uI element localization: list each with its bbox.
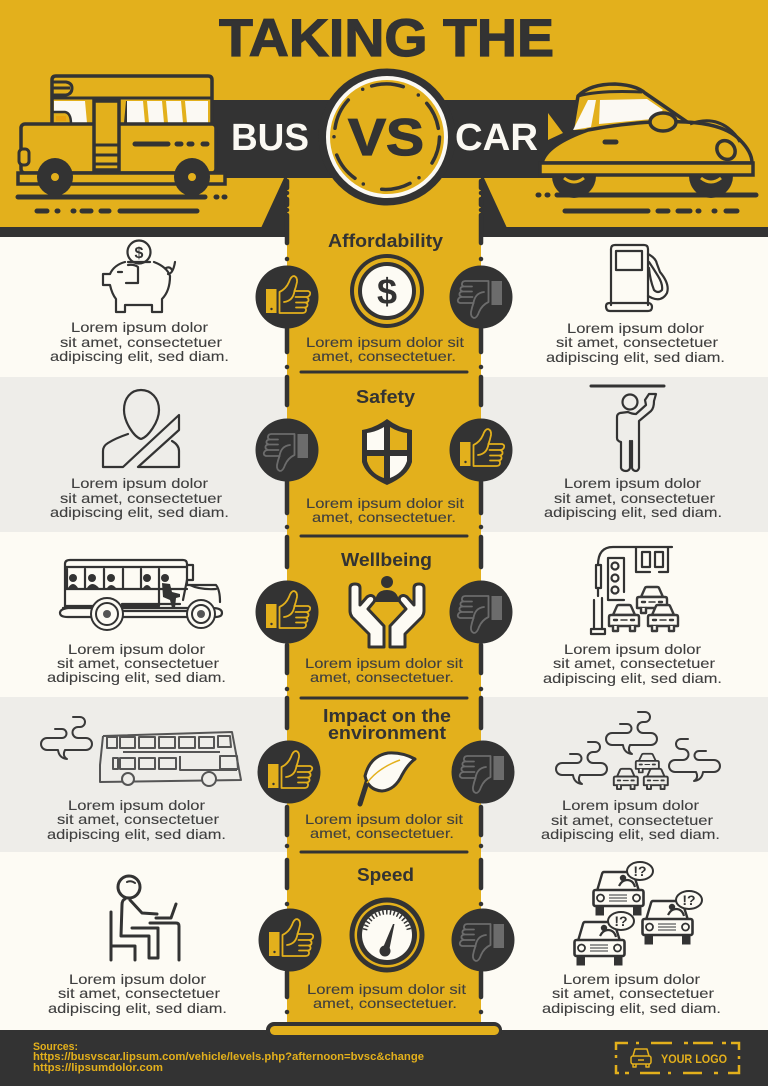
banner band <box>212 100 580 228</box>
background bands <box>0 236 768 1030</box>
row: speed <box>48 862 721 1016</box>
bus text: speed: adipiscing elit, sed diam. <box>48 1000 227 1016</box>
bus text: speed: sit amet, consectetuer <box>58 985 220 1001</box>
standing passenger icon <box>591 386 664 471</box>
car text: wellbeing: adipiscing elit, sed diam. <box>543 670 722 686</box>
column text: affordability: Lorem ipsum dolor sit <box>306 334 464 350</box>
row: wellbeing <box>47 547 722 686</box>
bus text: speed <box>48 971 227 1016</box>
traffic jam icon <box>591 547 678 634</box>
row: environment <box>41 706 720 842</box>
VS badge: VS <box>348 109 424 167</box>
column text: affordability: amet, consectetuer. <box>312 348 456 364</box>
car text: affordability: adipiscing elit, sed diam. <box>546 349 725 365</box>
thumbs down <box>450 266 512 328</box>
column base <box>266 1022 502 1038</box>
heading: wellbeing: Wellbeing <box>341 550 432 570</box>
CAR label: CAR <box>455 117 538 159</box>
car text: affordability <box>546 320 725 365</box>
car illustration <box>538 84 756 211</box>
thumbs down <box>256 418 318 482</box>
column text: wellbeing <box>305 655 463 685</box>
car text: safety: adipiscing elit, sed diam. <box>544 504 722 520</box>
confused drivers icon <box>574 862 702 966</box>
car text: affordability: Lorem ipsum dolor <box>567 320 704 336</box>
bus text: environment: sit amet, consectetuer <box>57 811 219 827</box>
bus text: environment <box>47 797 226 842</box>
car text: affordability: sit amet, consectetuer <box>556 334 718 350</box>
thumbs up <box>450 418 512 482</box>
BUS label: BUS <box>231 117 309 159</box>
heading: speed: Speed <box>357 865 414 885</box>
sources: Sources: <box>33 1041 78 1053</box>
caring hands icon <box>350 576 424 647</box>
seat belt person icon <box>103 390 179 467</box>
bus text: affordability: Lorem ipsum dolor <box>71 319 208 335</box>
heading: safety: Safety <box>356 387 415 407</box>
car text: speed: adipiscing elit, sed diam. <box>542 1000 721 1016</box>
bus text: affordability: sit amet, consectetuer <box>60 334 222 350</box>
sources <box>33 1041 424 1074</box>
bus text: safety <box>50 475 229 520</box>
car text: speed: sit amet, consectetuer <box>552 985 714 1001</box>
car text: speed: Lorem ipsum dolor <box>563 971 700 987</box>
thumbs down <box>450 580 512 644</box>
car text: environment: sit amet, consectetuer <box>551 812 713 828</box>
bus smoke icon <box>41 717 92 759</box>
column text: speed: amet, consectetuer. <box>313 995 457 1011</box>
column text: environment <box>305 811 463 841</box>
thumbs up <box>256 266 318 328</box>
car text: wellbeing: sit amet, consectetuer <box>553 655 715 671</box>
double decker icon <box>100 732 241 786</box>
column text: safety: Lorem ipsum dolor sit <box>306 495 464 511</box>
car smoke icon <box>556 712 720 789</box>
row: affordability <box>50 231 725 365</box>
column text: affordability <box>306 334 464 364</box>
dollar coin icon: $ <box>377 271 397 312</box>
header <box>0 0 768 237</box>
car text: environment: adipiscing elit, sed diam. <box>541 826 720 842</box>
bus text: safety: adipiscing elit, sed diam. <box>50 504 229 520</box>
bus text: affordability: adipiscing elit, sed diam. <box>50 348 229 364</box>
VS badge <box>318 68 456 206</box>
heading: environment: environment <box>328 723 446 743</box>
car text: wellbeing <box>543 641 722 686</box>
column text: wellbeing: Lorem ipsum dolor sit <box>305 655 463 671</box>
bus text: affordability <box>50 319 229 364</box>
sources: https://busvscar.lipsum.com/vehicle/levels.php?afternoon=bvsc&change <box>33 1051 424 1063</box>
thumbs up <box>258 740 320 804</box>
bus illustration <box>18 76 225 211</box>
bus text: safety: sit amet, consectetuer <box>60 490 222 506</box>
logo text: YOUR LOGO <box>661 1052 727 1066</box>
person at laptop icon <box>111 876 179 960</box>
header base strip <box>0 227 768 237</box>
petrol pump icon <box>606 245 668 311</box>
bus text: wellbeing <box>47 641 226 685</box>
column text: speed: Lorem ipsum dolor sit <box>307 981 466 997</box>
car text: wellbeing: Lorem ipsum dolor <box>564 641 701 657</box>
column text: wellbeing: amet, consectetuer. <box>310 669 454 685</box>
shield icon <box>362 419 412 485</box>
column text: safety <box>306 495 464 525</box>
thumbs up <box>256 580 318 644</box>
sources: https://lipsumdolor.com <box>33 1062 163 1074</box>
bus text: wellbeing: Lorem ipsum dolor <box>68 641 205 657</box>
section dividers <box>301 372 467 852</box>
heading: environment <box>323 706 451 743</box>
leaf icon <box>360 753 415 804</box>
bus text: safety: Lorem ipsum dolor <box>71 475 208 491</box>
speedometer icon <box>350 898 424 972</box>
bus text: wellbeing: adipiscing elit, sed diam. <box>47 669 226 685</box>
car text: safety: sit amet, consectetuer <box>554 490 715 506</box>
thumbs up <box>258 908 322 972</box>
title: TAKING THE <box>219 9 554 68</box>
car text: environment: Lorem ipsum dolor <box>562 797 699 813</box>
car text: environment <box>541 797 720 842</box>
dollar coin icon <box>350 254 424 328</box>
thumbs down <box>452 908 514 972</box>
dashed column edges <box>287 181 481 1012</box>
bus text: environment: adipiscing elit, sed diam. <box>47 826 226 842</box>
logo placeholder <box>616 1043 739 1073</box>
thumbs down <box>452 740 514 804</box>
car text: speed <box>542 971 721 1016</box>
row: safety <box>50 386 722 525</box>
column text: safety: amet, consectetuer. <box>312 509 456 525</box>
column text: environment: amet, consectetuer. <box>310 825 454 841</box>
column text: speed <box>307 981 466 1011</box>
heading: affordability: Affordability <box>328 231 443 251</box>
heading: environment: Impact on the <box>323 706 451 726</box>
car text: safety <box>544 475 722 520</box>
centre column <box>287 178 481 1028</box>
column text: environment: Lorem ipsum dolor sit <box>305 811 463 827</box>
bus text: speed: Lorem ipsum dolor <box>69 971 206 987</box>
car text: safety: Lorem ipsum dolor <box>564 475 701 491</box>
bus text: environment: Lorem ipsum dolor <box>68 797 205 813</box>
footer <box>0 1022 768 1086</box>
logo car icon <box>631 1049 651 1067</box>
piggy bank icon <box>103 240 175 312</box>
bus text: wellbeing: sit amet, consectetuer <box>57 655 219 671</box>
piggy bank icon: $ <box>135 245 144 262</box>
jeepney icon <box>60 560 222 630</box>
